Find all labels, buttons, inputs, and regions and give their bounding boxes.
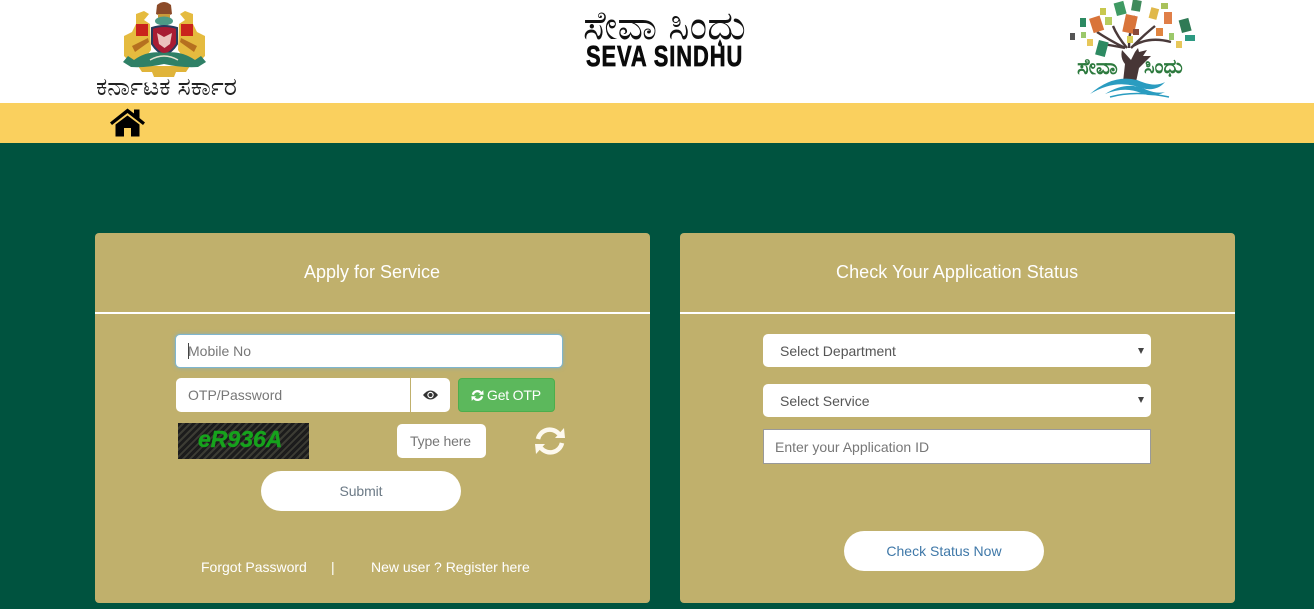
- input: mobile number: [175, 334, 563, 368]
- input: captcha: [397, 424, 486, 458]
- button: submit: Submit: [340, 483, 382, 499]
- button: submit: [261, 471, 461, 511]
- heading: check application status: Check Your Application Status: [836, 262, 1078, 282]
- button: get OTP: [458, 378, 555, 412]
- button: check status: [844, 531, 1044, 571]
- select: department: [763, 334, 1151, 367]
- logo: Seva Sindhu tree: [1070, 0, 1195, 98]
- input: application ID: [763, 429, 1151, 464]
- dropdown arrow: [1138, 397, 1144, 403]
- input: OTP or password: [176, 378, 410, 412]
- crown: [156, 2, 172, 16]
- emblem: Karnataka state crest: [123, 2, 206, 77]
- lions: [124, 11, 151, 62]
- logo caption right: ಸಿಂಧು: [1144, 56, 1183, 78]
- captcha image: [178, 423, 309, 459]
- input: application ID: Enter your Application ID: [775, 439, 929, 455]
- icon: home: [110, 108, 145, 136]
- waves: [1090, 79, 1165, 94]
- input: OTP or password: OTP/Password: [188, 387, 282, 403]
- panel: apply for service: [95, 233, 650, 603]
- button: show password: [411, 378, 450, 412]
- scroll: [123, 52, 206, 67]
- label: Get OTP: [487, 387, 541, 403]
- input: captcha: Type here: [410, 433, 471, 449]
- select: service: [763, 384, 1151, 417]
- separator: |: [331, 559, 335, 575]
- pedestal: [138, 66, 190, 77]
- icon: refresh: [471, 390, 484, 401]
- header bar: [0, 0, 1314, 103]
- text cursor: [188, 343, 189, 359]
- panel: check application status: [680, 233, 1235, 603]
- captcha image: eR936A: [198, 426, 282, 452]
- link: new user register: New user ? Register here: [371, 559, 530, 575]
- logo caption left: ಸೇವಾ: [1077, 54, 1118, 79]
- shield: [152, 26, 177, 55]
- title: SEVA SINDHU: SEVA SINDHU: [586, 41, 743, 73]
- input: mobile number: Mobile No: [188, 343, 251, 359]
- link: forgot password: Forgot Password: [201, 559, 307, 575]
- select: service: Select Service: [780, 393, 869, 409]
- icon: refresh captcha: [535, 427, 565, 455]
- caption: Karnataka Sarkara: ಕರ್ನಾಟಕ ಸರ್ಕಾರ: [96, 73, 237, 101]
- dropdown arrow: [1138, 348, 1144, 354]
- icon: eye: [423, 390, 438, 400]
- branches: [1097, 16, 1171, 48]
- navigation band: [0, 103, 1314, 143]
- select: department: Select Department: [780, 343, 896, 359]
- title: Kannada: ಸೇವಾ ಸಿಂಧು: [583, 4, 746, 48]
- heading: apply for service: Apply for Service: [304, 262, 440, 282]
- leaves: [1114, 1, 1127, 16]
- trunk and hand: [1121, 48, 1151, 82]
- button: check status: Check Status Now: [886, 543, 1002, 559]
